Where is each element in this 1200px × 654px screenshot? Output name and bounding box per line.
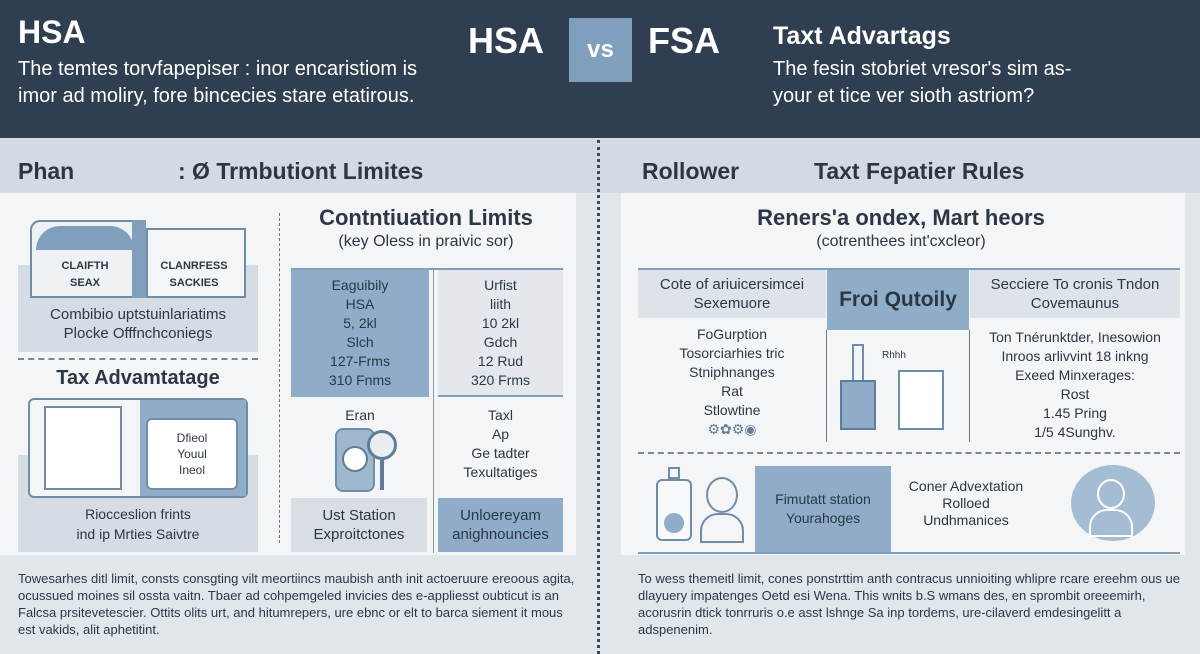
illustration: documents: Riocceslion frints bbox=[85, 506, 191, 522]
heading: Tax Advantage: Tax Advamtatage bbox=[56, 367, 220, 389]
subtitle left bbox=[18, 58, 417, 107]
table: rules: Stlowtine bbox=[704, 402, 760, 418]
table: limits: Taxl bbox=[488, 407, 513, 423]
illustration: boxes: CLANRFESS bbox=[160, 260, 228, 272]
section heading band bbox=[0, 138, 1200, 193]
dashed dividers bbox=[18, 358, 258, 360]
table: limits: Ust Station bbox=[322, 507, 396, 524]
illustration: boxes bbox=[18, 220, 258, 352]
illustration: documents bbox=[18, 398, 258, 552]
illustration: boxes: SACKIES bbox=[170, 277, 218, 289]
text block bbox=[909, 478, 1023, 528]
heading: tax rules: Taxt Fepatier Rules bbox=[814, 158, 1024, 184]
table: limits bbox=[291, 268, 563, 553]
table: rules: 1/5 4Sunghv. bbox=[1034, 424, 1116, 440]
header band bbox=[0, 0, 1200, 138]
table: rules: Stniphnanges bbox=[689, 364, 775, 380]
table: limits: Exproitctones bbox=[314, 526, 404, 543]
table: rules: Cote of ariuicersimcei bbox=[660, 276, 804, 293]
table: rules: ⚙✿⚙◉ bbox=[707, 421, 757, 437]
icon: bottle and person bbox=[656, 467, 744, 543]
center title HSA vs FSA: FSA bbox=[648, 20, 720, 61]
subheading: (cotrenthees int'cxcleor) bbox=[816, 233, 986, 250]
table: rules: 1.45 Pring bbox=[1043, 405, 1107, 421]
panel: right bbox=[621, 193, 1185, 555]
icon: jar with magnifier: Eran bbox=[345, 407, 375, 423]
subtitle right: your et tice ver sioth astriom? bbox=[773, 85, 1034, 107]
table: limits: Ge tadter bbox=[471, 445, 530, 461]
table: limits: Gdch bbox=[484, 334, 517, 350]
subtitle left: imor ad moliry, fore bincecies stare etatirous. bbox=[18, 85, 414, 107]
table: limits: Eaguibily bbox=[332, 277, 388, 293]
callout: blue box bbox=[755, 466, 891, 552]
table: limits: Unloereyam bbox=[460, 507, 541, 524]
callout: blue box: Yourahoges bbox=[786, 510, 860, 526]
table: limits: HSA bbox=[346, 296, 374, 312]
center title HSA vs FSA: vs bbox=[587, 36, 614, 63]
icon: jar with magnifier bbox=[335, 407, 397, 492]
callout: blue box: Fimutatt station bbox=[775, 491, 871, 507]
table: limits: 12 Rud bbox=[478, 353, 523, 369]
table: rules bbox=[638, 268, 1180, 442]
table: limits: Slch bbox=[346, 334, 374, 350]
center title HSA vs FSA bbox=[468, 18, 720, 82]
title right: Taxt Advartags bbox=[773, 22, 951, 50]
table: limits: Urfist bbox=[484, 277, 517, 293]
icon: person in circle bbox=[1071, 465, 1155, 541]
subtitle right: The fesin stobriet vresor's sim as- bbox=[773, 58, 1071, 80]
table: rules: Exeed Minxerages: bbox=[1015, 367, 1135, 383]
text block: Undhmanices bbox=[923, 512, 1009, 528]
text block: right footnote: To wess themeitl limit, cones ponstrttim anth contracus unnioiting whlipre rcare ereehm ous ue dlayuery impatenges Oetd esi Wena. This wnits b.S wmans des, en sprombit oreeemirh, acorusrin dtick tonrruris o.e asst lshnge Sa inp tordems, ure-cilaverd emdesingelitt a adspenenim. bbox=[638, 571, 1180, 637]
icon: machine bbox=[840, 344, 944, 430]
table: limits: 310 Fnms bbox=[329, 372, 391, 388]
icon: machine: Rhhh bbox=[882, 350, 906, 361]
text block: left footnote: Towesarhes ditl limit, consts consgting vilt meortiincs maubish anth init actoeruure ereoous agita, ocussued moines sil ossta vaitn. Tbaer ad cohpemgeled invicies des e-appliesst oubticut is an Falcsa prsitevetescier. Ottits olits urt, and hitumrepers, ure ebnc or elt to barca siement it mous est vakids, alit aphetitint. bbox=[18, 571, 574, 637]
illustration: documents: Youul bbox=[177, 447, 207, 461]
table: rules: Secciere To cronis Tndon bbox=[991, 276, 1159, 293]
illustration: boxes: CLAIFTH bbox=[61, 260, 109, 272]
table: rules: Tosorciarhies tric bbox=[679, 345, 785, 361]
table: rules: FoGurption bbox=[697, 326, 767, 342]
table: limits: Texultatiges bbox=[464, 464, 537, 480]
text block: Coner Advextation bbox=[909, 478, 1023, 494]
table: limits: anighnouncies bbox=[452, 526, 549, 543]
illustration: documents: ind ip Mrties Saivtre bbox=[77, 526, 199, 542]
illustration: documents: Dfieol bbox=[177, 431, 207, 445]
table: limits: Ap bbox=[492, 426, 509, 442]
table: rules: Inroos arlivvint 18 inkng bbox=[1001, 348, 1149, 364]
illustration: documents: Ineol bbox=[179, 463, 205, 477]
center title HSA vs FSA: HSA bbox=[468, 20, 544, 61]
heading: Rollower: Rollower bbox=[642, 158, 739, 184]
text block: Rolloed bbox=[942, 495, 990, 511]
subtitle left: The temtes torvfapepiser : inor encaristiom is bbox=[18, 58, 417, 80]
table: rules: Froi Qutoily bbox=[839, 288, 957, 311]
table: limits: 127-Frms bbox=[330, 353, 390, 369]
title left: HSA: HSA bbox=[18, 14, 86, 50]
table: limits: 10 2kl bbox=[482, 315, 519, 331]
table: rules: Covemaunus bbox=[1031, 295, 1119, 312]
table: rules: Rost bbox=[1061, 386, 1089, 402]
table: rules: Sexemuore bbox=[694, 295, 770, 312]
illustration: boxes: SEAX bbox=[70, 277, 100, 289]
center dashed divider bbox=[597, 140, 600, 654]
subheading: (key Oless in praivic sor) bbox=[338, 233, 514, 250]
table: limits: 5, 2kl bbox=[343, 315, 377, 331]
heading: Reners'a ondex, Mart heors bbox=[757, 205, 1045, 230]
heading: Phan: Phan bbox=[18, 158, 74, 184]
table: limits: liith bbox=[490, 296, 511, 312]
subtitle right bbox=[773, 58, 1071, 107]
table: limits: 320 Frms bbox=[471, 372, 530, 388]
heading: contribution limits: : Ø Trmbutiont Limites bbox=[178, 158, 423, 184]
heading: contribution limits: Contntiuation Limits bbox=[319, 205, 533, 230]
table: rules: Rat bbox=[721, 383, 743, 399]
table: rules: Ton Tnérunktder, Inesowion bbox=[989, 329, 1161, 345]
panel: left bbox=[0, 193, 576, 555]
illustration: boxes: Combibio uptstuinlariatims bbox=[50, 306, 226, 323]
illustration: boxes: Plocke Offfnchconiegs bbox=[64, 325, 212, 342]
